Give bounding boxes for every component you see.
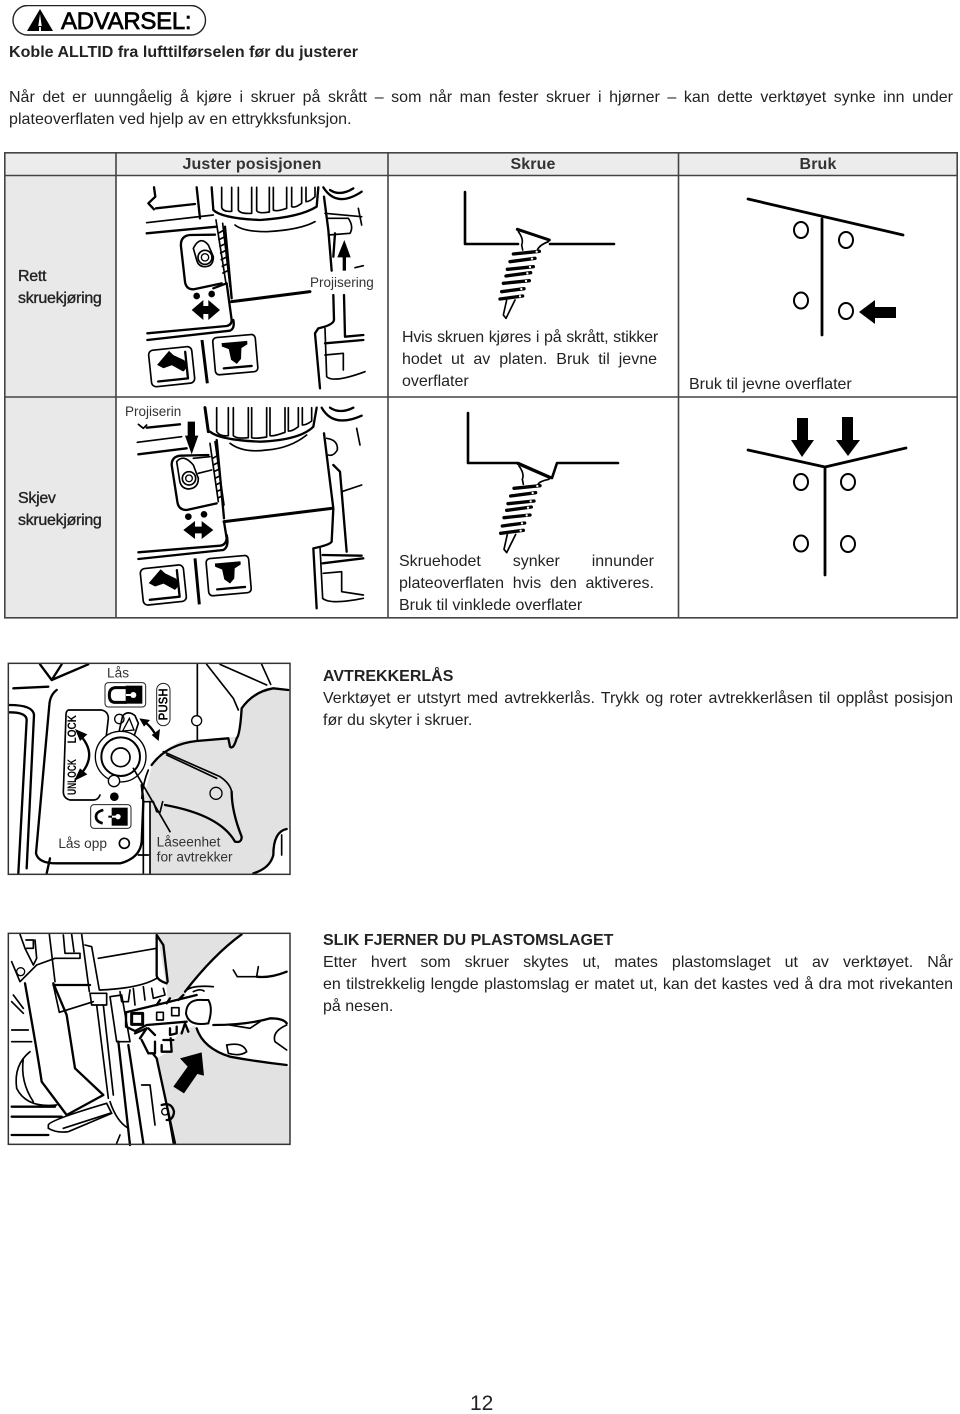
- intro paragraph: [9, 89, 953, 128]
- lock and unlock scale: UNLOCK: [65, 759, 79, 795]
- panel: collation removal illustration: [8, 932, 291, 1146]
- body text: collation removal: en tilstrekkelig lengde plastomslag er matet ut, kan det kastes ved å dra mot rivekanten: [323, 976, 953, 993]
- lock and unlock scale: [65, 715, 79, 795]
- warning subheading: Koble ALLTID fra lufttilførselen før du justerer: [9, 44, 358, 61]
- body text: collation removal: Etter hvert som skruer skytes ut, mates plastomslaget ut av verktøyet. Når: [323, 954, 953, 971]
- table header: Bruk: Bruk: [800, 156, 836, 173]
- usage text: straight: Bruk til jevne overflater: [689, 376, 852, 393]
- row label: Skjev skruekjøring: Skjev: [18, 490, 56, 507]
- heading: SLIK FJERNER DU PLASTOMSLAGET: SLIK FJERNER DU PLASTOMSLAGET: [323, 932, 613, 949]
- intro paragraph: plateoverflaten ved hjelp av en ettrykksfunksjon.: [9, 111, 352, 128]
- push button label: PUSH: [156, 688, 170, 720]
- row label: Rett skruekjøring: skruekjøring: [18, 290, 102, 307]
- panel: trigger lock illustration: [8, 662, 291, 876]
- illustration: straight drive adjuster: [147, 187, 365, 388]
- heading: AVTREKKERLÅS: AVTREKKERLÅS: [323, 668, 453, 684]
- panel: adjustment table: [4, 152, 958, 619]
- warning word: ADVARSEL:: [61, 8, 191, 35]
- section text: collation removal: [323, 932, 953, 1015]
- warning badge: [12, 5, 206, 36]
- row label: Skjev skruekjøring: [18, 490, 102, 529]
- intro paragraph: Når det er uunngåelig å kjøre i skruer på skrått – som når man fester skruer i hjørner – kan dette verktøyet synke inn under: [9, 89, 953, 106]
- illustration: angled surface use: [748, 417, 906, 575]
- body text: collation removal: [323, 954, 953, 1015]
- hand holding strip: [185, 934, 287, 1065]
- lock icon: [105, 683, 146, 707]
- row label: Rett skruekjøring: Rett: [18, 268, 46, 285]
- label: Projisering (angled, cut off): Projiserin: [125, 404, 181, 419]
- table grid and illustrations: [4, 152, 958, 619]
- body text: trigger lock: Verktøyet er utstyrt med avtrekkerlås. Trykk og roter avtrekkerlåsen til opplåst posisjon: [323, 690, 953, 706]
- screw text: straight: [402, 329, 658, 390]
- screw text: angled: Bruk til vinklede overflater: [399, 597, 582, 614]
- screw text: straight: hodet ut av platen. Bruk til jevne: [402, 351, 657, 368]
- illustration: screw flush in plate: [465, 192, 614, 318]
- row label: Skjev skruekjøring: skruekjøring: [18, 512, 102, 529]
- illustration: flat surface use: [748, 199, 903, 335]
- lever dial: [95, 713, 222, 848]
- label: Projisering (straight): Projisering: [310, 275, 374, 290]
- label: Lås: Lås: [107, 666, 129, 681]
- screw text: angled: [399, 553, 654, 614]
- section text: trigger lock: [323, 667, 953, 728]
- illustration: screw sunk into plate: [468, 413, 618, 553]
- body text: collation removal: på nesen.: [323, 998, 393, 1015]
- warning pill and triangle icon: [12, 5, 206, 36]
- label: Lås opp: Lås opp: [58, 836, 107, 851]
- body text: trigger lock: før du skyter i skruer.: [323, 712, 472, 728]
- screw text: angled: plateoverflaten hvis den aktiveres.: [399, 575, 654, 592]
- label: trigger lock unit: for avtrekker: [157, 850, 233, 865]
- illustration: angled drive adjuster: [137, 408, 363, 608]
- screw text: straight: overflater: [402, 373, 469, 390]
- arrows: down: [791, 417, 860, 457]
- label: trigger lock unit: Låseenhet: [157, 834, 220, 849]
- tool body lines: [12, 934, 175, 1145]
- lock and unlock scale: LOCK: [65, 715, 79, 743]
- row label: Rett skruekjøring: [18, 268, 102, 307]
- table header: Juster posisjonen: Juster posisjonen: [183, 156, 321, 173]
- body text: trigger lock: [323, 690, 953, 728]
- screw text: angled: Skruehodet synker innunder: [399, 553, 654, 570]
- table header: Skrue: Skrue: [510, 156, 556, 173]
- arrow: left: [859, 300, 896, 324]
- screw text: straight: Hvis skruen kjøres i på skrått, stikker: [402, 329, 658, 346]
- arrow: push up: [173, 1052, 204, 1093]
- plastic collation strip: [126, 993, 200, 1055]
- unlock icon: [91, 805, 131, 828]
